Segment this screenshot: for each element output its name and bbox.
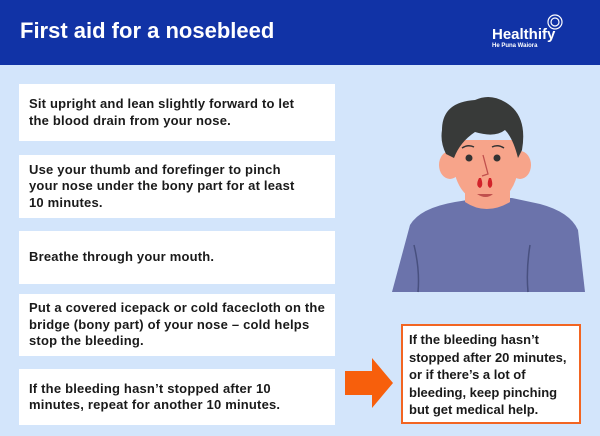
- step 3: [19, 231, 335, 284]
- logo: [492, 14, 563, 49]
- logo: Healthify: [492, 26, 555, 43]
- callout: [401, 324, 581, 424]
- callout: bleeding, keep pinching: [409, 384, 557, 400]
- callout: or if there’s a lot of: [409, 367, 526, 382]
- callout: but get medical help.: [409, 402, 538, 417]
- title: First aid for a nosebleed: [20, 18, 274, 43]
- header: [0, 0, 600, 65]
- step 2: 10 minutes.: [29, 195, 103, 210]
- step 3: Breathe through your mouth.: [29, 249, 214, 264]
- step 5: If the bleeding hasn’t stopped after 10: [29, 380, 271, 396]
- illustration: person with nosebleed: [392, 97, 585, 292]
- logo: He Puna Waiora: [492, 43, 537, 49]
- callout: stopped after 20 minutes,: [409, 350, 566, 364]
- step 4: Put a covered icepack or cold facecloth on the: [29, 300, 325, 315]
- step 2: Use your thumb and forefinger to pinch: [29, 162, 281, 177]
- step 5: [19, 369, 335, 425]
- step 2: your nose under the bony part for at least: [29, 178, 295, 193]
- step 5: minutes, repeat for another 10 minutes.: [29, 397, 280, 412]
- step 1: Sit upright and lean slightly forward to let: [29, 96, 294, 111]
- step 4: bridge (bony part) of your nose – cold helps: [29, 317, 309, 332]
- step 1: [19, 84, 335, 141]
- step 4: stop the bleeding.: [29, 333, 144, 348]
- step 4: [19, 294, 335, 356]
- step 2: [19, 155, 335, 218]
- step 1: the blood drain from your nose.: [29, 112, 231, 128]
- arrow: [345, 358, 393, 408]
- callout: If the bleeding hasn’t: [409, 332, 539, 347]
